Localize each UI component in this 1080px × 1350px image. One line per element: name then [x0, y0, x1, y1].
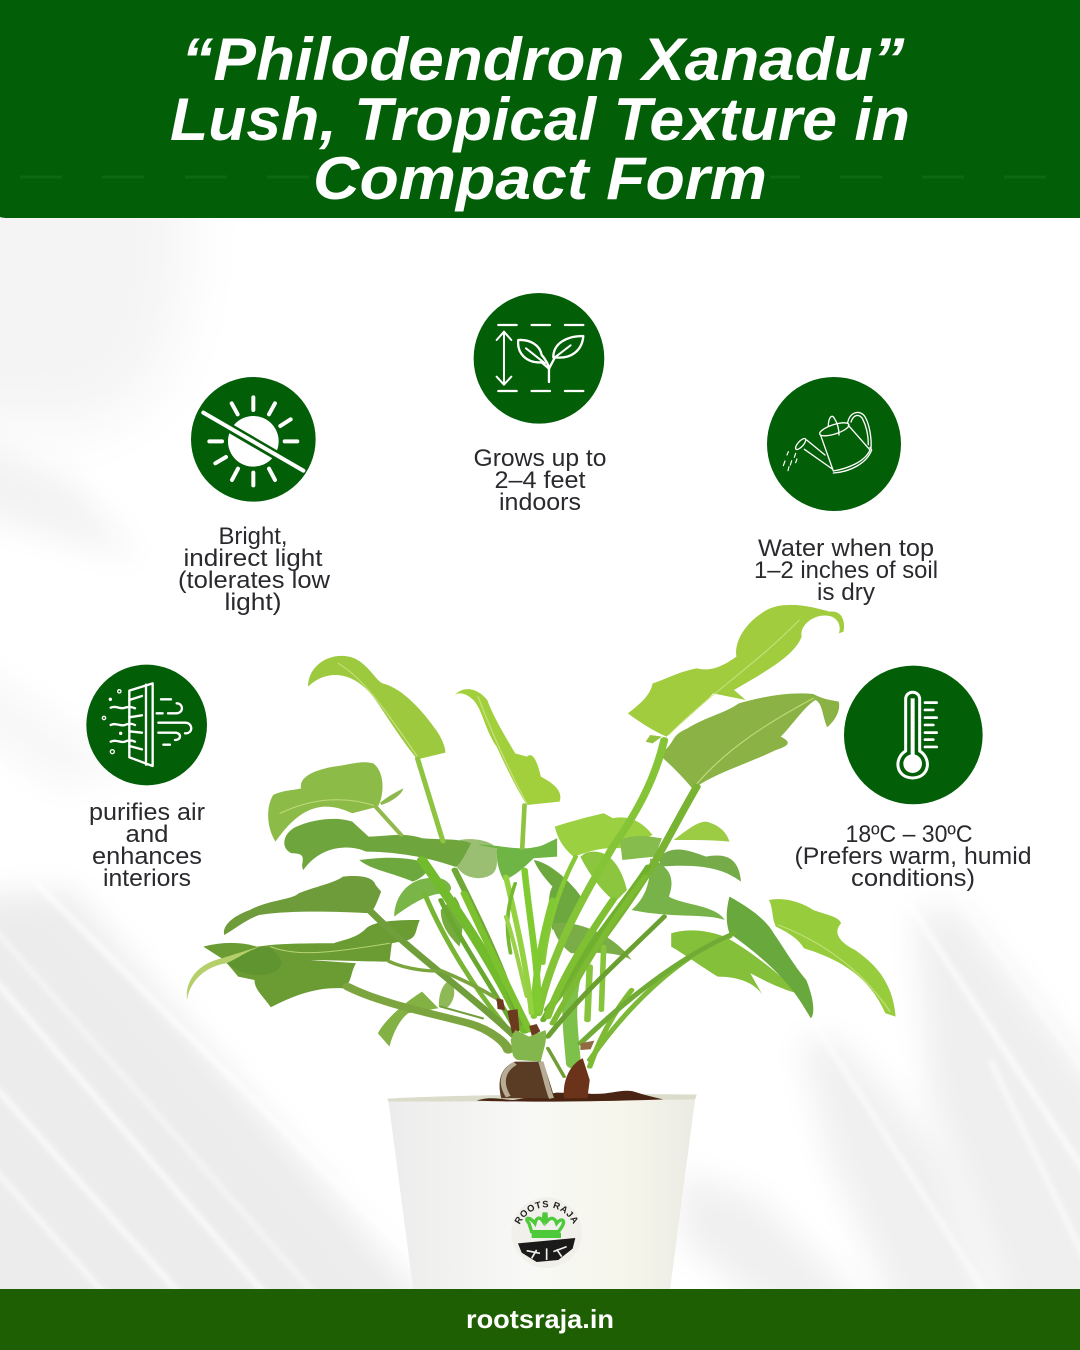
label: light: Bright, [218, 523, 288, 550]
label: height [474, 445, 606, 516]
leaf: top left [308, 656, 445, 759]
label: light: indirect light [184, 545, 323, 572]
stems [348, 740, 734, 1050]
label: light: light) [224, 589, 282, 616]
icon: air purifier [86, 665, 207, 785]
footer bar [0, 1289, 1080, 1350]
label: light: (tolerates low [178, 567, 331, 594]
website: rootsraja.in [466, 1304, 614, 1334]
leaf: left upper [268, 762, 403, 842]
label: air: interiors [103, 865, 191, 892]
leaves: right side [671, 897, 896, 1018]
label: watering: is dry [817, 579, 875, 606]
label: watering: 1–2 inches of soil [754, 557, 938, 584]
label: air: and [126, 821, 168, 848]
label: temperature [794, 821, 1032, 892]
label: watering: Water when top [758, 535, 934, 562]
leaves: centre cluster [478, 813, 741, 920]
label: height: 2–4 feet [494, 467, 586, 494]
leaf: lower left [224, 876, 381, 935]
label: temperature: 18ºC – 30ºC [846, 821, 972, 848]
leaf: far left [187, 920, 420, 1007]
leaf: tall centre [455, 689, 560, 805]
label: temperature: (Prefers warm, humid [794, 843, 1032, 870]
label: temperature: conditions) [851, 865, 975, 892]
pot sticker logo [512, 1198, 578, 1268]
stem base and roots [497, 998, 594, 1098]
label: air: purifies air [89, 799, 205, 826]
label: light [178, 523, 331, 616]
pot sticker logo: ROOTS RAJA [514, 1200, 578, 1224]
icon: thermometer [844, 666, 983, 804]
leaf: top right [628, 605, 844, 743]
icon: height with sprout [474, 293, 604, 424]
back stems and leaves [359, 839, 729, 1077]
label: air: enhances [92, 843, 202, 870]
plant pot [387, 1090, 696, 1289]
label: height: indoors [499, 489, 581, 516]
icon: no direct sun [191, 377, 316, 502]
leaf: wide middle left [284, 819, 471, 870]
title: “Philodendron Xanadu” [182, 26, 904, 93]
header banner [0, 0, 1080, 218]
label: watering [754, 535, 938, 606]
title [170, 26, 910, 212]
leaf: upper right [660, 693, 839, 788]
icon: watering can [767, 377, 901, 511]
title: Compact Form [313, 145, 767, 212]
label: air [89, 799, 205, 892]
label: height: Grows up to [474, 445, 606, 472]
title: Lush, Tropical Texture in [170, 86, 910, 153]
plant [187, 605, 896, 1098]
